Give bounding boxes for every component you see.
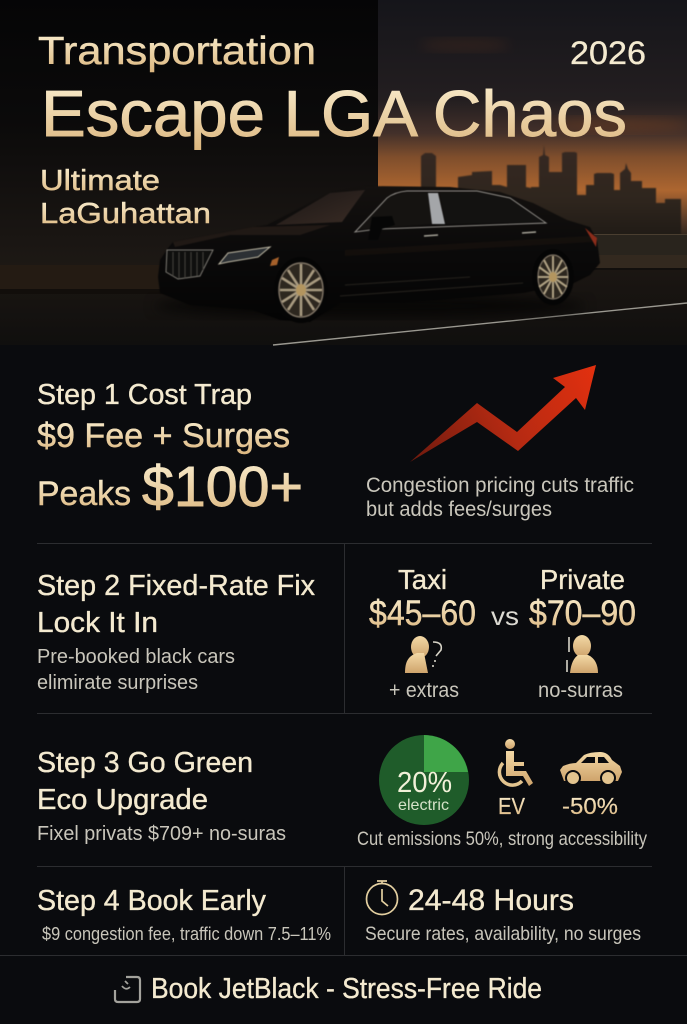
taxi column: + extras <box>389 679 459 702</box>
window pillar <box>428 193 445 224</box>
step 4 heading: Step 4 Book Early <box>37 885 266 917</box>
congestion note: but adds fees/surges <box>366 497 552 521</box>
panel: step 1 cost trap <box>37 365 634 521</box>
lane line <box>273 303 687 345</box>
icon: phone booking <box>115 977 140 1002</box>
title block: LaGuhattan <box>40 198 211 230</box>
hero photo: limousine at dusk with skyline <box>0 0 687 345</box>
icon: person with question mark <box>405 636 441 673</box>
pie chart: 20% electric <box>379 735 469 825</box>
city skyline <box>421 145 681 238</box>
minus 50 percent label: -50% <box>562 793 618 819</box>
call to action <box>115 973 542 1005</box>
grille <box>166 250 213 279</box>
step 3 heading: Step 3 Go Green <box>37 747 253 779</box>
panel: step 4 book early <box>37 885 331 944</box>
EV label: EV <box>498 793 526 819</box>
title block <box>38 30 646 230</box>
comparison: taxi vs private <box>369 564 636 702</box>
taxi column <box>369 564 476 702</box>
kicker: Transportation: Transportation <box>38 30 316 73</box>
step 2 heading: Step 2 Fixed-Rate Fix <box>37 570 315 602</box>
private column: Private <box>540 564 625 595</box>
car shadow <box>155 294 585 318</box>
taxi column: $45–60 <box>369 593 476 633</box>
pie chart: 20% electric: electric <box>398 797 449 814</box>
CTA text: Book JetBlack - Stress-Free Ride <box>151 973 542 1005</box>
windshield <box>276 190 365 225</box>
subtitle: Ultimate <box>40 165 160 197</box>
panel: step 2 fixed-rate fix <box>37 570 315 694</box>
panel: step 2 fixed-rate fix: Lock It In <box>37 607 158 639</box>
private column: no-surras <box>538 679 623 702</box>
panel: step 3 go green <box>37 747 286 845</box>
step 1 heading: Step 1 Cost Trap <box>37 379 252 411</box>
step 2 description: Pre-booked black cars <box>37 646 235 668</box>
side windows <box>357 192 432 230</box>
icon: car <box>560 752 622 786</box>
main heading: Escape LGA Chaos <box>41 77 627 150</box>
headlight <box>219 247 270 264</box>
peak value: $100+ <box>142 455 303 519</box>
private column <box>529 564 636 702</box>
step 3 description: Fixel privats $709+ no-suras <box>37 823 286 845</box>
step 4 description: $9 congestion fee, traffic down 7.5–11% <box>42 923 331 944</box>
taxi column: Taxi <box>398 564 447 595</box>
availability note: Secure rates, availability, no surges <box>365 923 641 945</box>
tail light <box>585 228 597 247</box>
peaks label: Peaks <box>37 475 131 513</box>
24-48 hours: 24-48 Hours <box>408 884 574 917</box>
pie chart: 20% electric: 20% <box>397 767 452 799</box>
year: 2026 <box>570 35 646 71</box>
parapet behind the car <box>590 234 687 255</box>
icon: rising red arrow <box>410 365 596 462</box>
panel: step 3 go green: Eco Upgrade <box>37 784 208 816</box>
icon: stopwatch <box>366 881 398 914</box>
icon: person with exclamation mark <box>567 635 598 673</box>
fee line: $9 Fee + Surges <box>37 417 290 455</box>
vs label: vs <box>491 601 519 631</box>
step 2 description: elimirate surprises <box>37 672 198 694</box>
car <box>158 186 600 323</box>
congestion note: Congestion pricing cuts traffic <box>366 473 634 497</box>
front wheel <box>274 257 328 323</box>
panel: booking window <box>365 881 641 945</box>
door handles <box>424 232 536 236</box>
private column: $70–90 <box>529 593 636 633</box>
sills <box>340 277 523 296</box>
rear wheel <box>532 249 574 305</box>
wing mirror <box>368 216 395 240</box>
icon: wheelchair <box>499 739 533 786</box>
